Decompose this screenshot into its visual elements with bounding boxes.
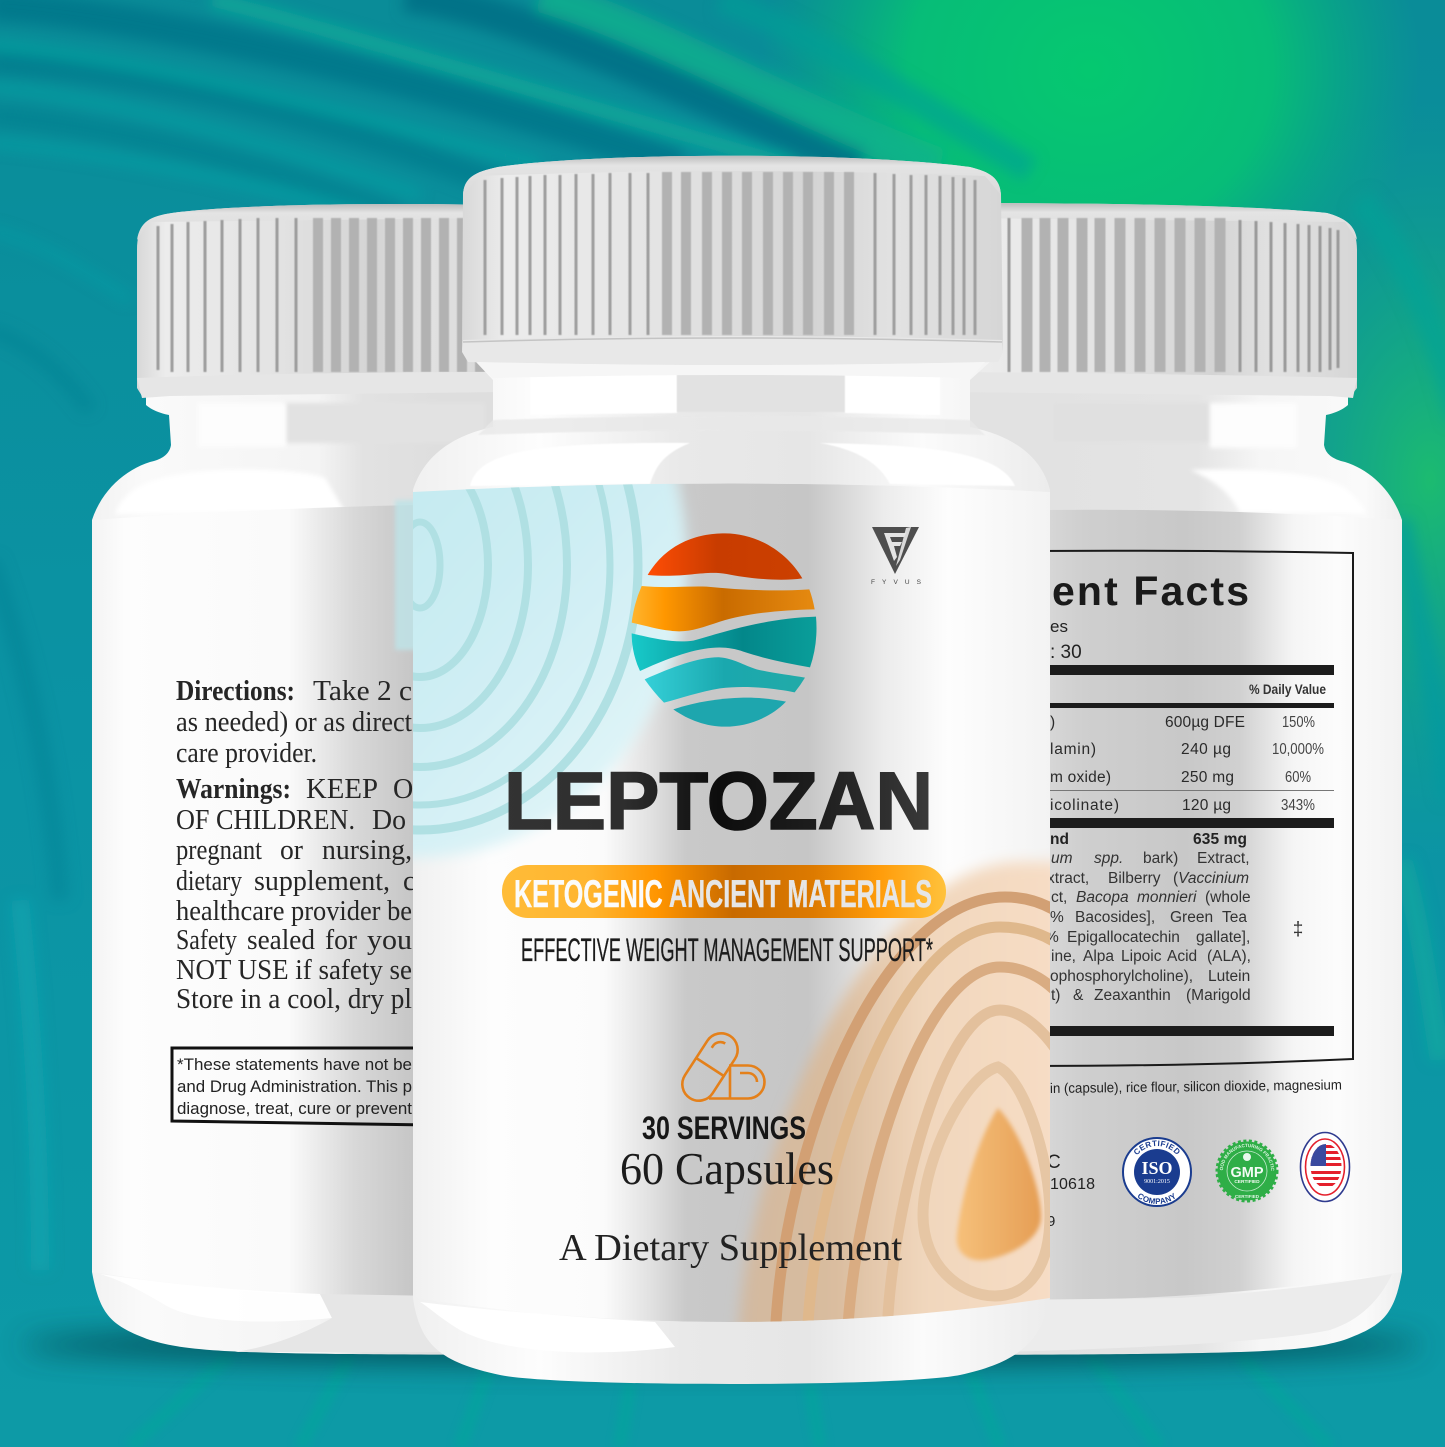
- serving info: es: [1050, 617, 1068, 636]
- warnings text: you: [367, 925, 412, 956]
- directions text: [176, 676, 412, 769]
- tagline pill: [502, 865, 946, 918]
- warnings text: Warnings:: [176, 774, 291, 805]
- maker logo: FYVUS: [871, 527, 922, 586]
- blend ingredient paragraph: Tea: [1222, 909, 1247, 926]
- directions text: as needed) or as direct: [176, 707, 412, 738]
- warnings text: sealed: [247, 925, 315, 956]
- blend ingredient paragraph: (: [1173, 870, 1179, 887]
- warnings text: Do: [372, 805, 406, 836]
- nutrient table rows: ): [1050, 714, 1055, 731]
- nutrient table rows: [1050, 714, 1324, 814]
- blend ingredient paragraph: Extract,: [1197, 850, 1250, 867]
- directions text: care provider.: [176, 738, 317, 769]
- centre bottle body: [413, 362, 1050, 1384]
- left bottle label: [92, 505, 420, 1300]
- left bottle cap: [137, 204, 500, 398]
- centre bottle: front label: [413, 156, 1050, 1384]
- badge: ISO certified: CERTIFIED: [1134, 1140, 1180, 1154]
- other ingredients line: in (capsule), rice flour, silicon dioxide, magnesium: [1050, 1076, 1342, 1096]
- double dagger symbol: ‡: [1293, 919, 1303, 940]
- proprietary blend row: [1050, 831, 1247, 848]
- warnings text: [176, 774, 415, 1015]
- blend ingredient paragraph: (ALA),: [1207, 948, 1251, 965]
- warnings text: O: [393, 774, 413, 805]
- blend ingredient paragraph: ine,: [1051, 948, 1076, 965]
- nutrient table rows: 10,000%: [1272, 741, 1324, 758]
- blend ingredient paragraph: &: [1073, 987, 1084, 1004]
- right bottle base: [1000, 1274, 1392, 1352]
- blend ingredient paragraph: %: [1050, 909, 1064, 926]
- badge: GMP certified: CERTIFIED: [1234, 1179, 1260, 1185]
- blend ingredient paragraph: ct,: [1051, 889, 1067, 906]
- reflection of blue swoosh: [395, 500, 417, 650]
- nutrient table rows: icolinate): [1050, 797, 1119, 814]
- nutrient table rows: 60%: [1285, 769, 1311, 786]
- badge: ISO certified: COMPANY: [1138, 1192, 1175, 1204]
- peach ripple swoosh: [734, 855, 1050, 1322]
- warnings text: c: [403, 866, 415, 897]
- manufacturer address fragments: [1047, 1152, 1095, 1230]
- centre bottle cap: [462, 156, 1003, 378]
- nutrient table rows: lamin): [1050, 741, 1096, 758]
- blend ingredient paragraph: [1045, 850, 1251, 1004]
- badge: USA flag: [1300, 1132, 1350, 1202]
- blend ingredient paragraph: Lipoic: [1121, 948, 1162, 965]
- serving info: [1050, 617, 1082, 663]
- left bottle shoulder shading: [115, 403, 485, 514]
- directions text: Directions:: [176, 676, 295, 707]
- blend ingredient paragraph: ophosphorylcholine),: [1050, 968, 1193, 985]
- proprietary blend row: 635 mg: [1193, 831, 1247, 848]
- blend ingredient paragraph: xtract,: [1047, 870, 1089, 887]
- blend ingredient paragraph: gallate],: [1196, 929, 1250, 946]
- proprietary blend row: nd: [1050, 831, 1069, 848]
- serving info: : 30: [1050, 642, 1082, 663]
- FDA disclaimer box: diagnose, treat, cure or prevent: [177, 1099, 412, 1118]
- brand logo: sun and waves: [632, 533, 817, 727]
- blend ingredient paragraph: Zeaxanthin: [1094, 987, 1171, 1004]
- warnings text: dietary: [176, 866, 242, 897]
- blend ingredient paragraph: %: [1045, 929, 1059, 946]
- badge: GMP certified: [1216, 1140, 1278, 1202]
- warnings text: nursing,: [322, 835, 412, 866]
- nutrient table rows: 240 µg: [1181, 741, 1231, 758]
- product name: LEPTOZAN: [504, 756, 933, 847]
- shoulder highlights: [470, 443, 1015, 486]
- supplement facts panel: [1030, 551, 1353, 1066]
- nutrient table rows: m oxide): [1050, 769, 1111, 786]
- left bottle body: [92, 388, 500, 1355]
- blend ingredient paragraph: (Marigold: [1186, 987, 1251, 1004]
- nutrient table rows: 343%: [1281, 797, 1315, 814]
- directions text: Take 2 c: [313, 676, 412, 707]
- warnings text: or: [280, 835, 304, 866]
- warnings text: for: [325, 925, 358, 956]
- badge: ISO certified: ISO: [1141, 1158, 1173, 1178]
- FDA disclaimer box: and Drug Administration. This p: [177, 1077, 412, 1096]
- warnings text: NOT USE if safety se: [176, 955, 412, 986]
- blend ingredient paragraph: (whole: [1205, 889, 1251, 906]
- blend ingredient paragraph: t): [1051, 987, 1060, 1004]
- blue ripple swoosh: [413, 484, 693, 860]
- servings count: 30 SERVINGS: [642, 1110, 806, 1146]
- badge: ISO certified: 9001:2015: [1144, 1179, 1170, 1185]
- maker logo: FYVUS: FYVUS: [871, 579, 922, 586]
- blend ingredient paragraph: Bilberry: [1108, 870, 1161, 887]
- warnings text: Safety: [176, 925, 237, 956]
- neck highlights: [478, 373, 985, 435]
- FDA disclaimer box: *These statements have not be: [177, 1055, 412, 1074]
- warnings text: Store in a cool, dry pl: [176, 984, 412, 1015]
- blend ingredient paragraph: spp.: [1094, 850, 1123, 867]
- nutrient table rows: 120 µg: [1182, 797, 1231, 814]
- subheading: EFFECTIVE WEIGHT MANAGEMENT SUPPORT*: [521, 932, 933, 968]
- panel border: [1030, 551, 1353, 1066]
- right bottle: supplement facts side: [92, 203, 1402, 1355]
- blend ingredient paragraph: Green: [1170, 909, 1213, 926]
- right bottle label: [1040, 510, 1402, 1300]
- peach teardrop: [957, 1108, 1041, 1260]
- tagline pill: KETOGENIC ANCIENT MATERIALS: [514, 873, 932, 916]
- right bottle shoulder shading: [1053, 403, 1366, 513]
- blend ingredient paragraph: Lutein: [1208, 968, 1250, 985]
- blend ingredient paragraph: Bacosides],: [1075, 909, 1155, 926]
- warnings text: healthcare provider be: [176, 896, 412, 927]
- left bottle base highlight: [100, 1274, 332, 1322]
- panel heading: ent Facts: [1052, 568, 1249, 614]
- warnings text: pregnant: [176, 835, 262, 866]
- blend ingredient paragraph: monnieri: [1137, 889, 1197, 906]
- capsule count: 60 Capsules: [620, 1143, 834, 1194]
- blend ingredient paragraph: Acid: [1167, 948, 1197, 965]
- left bottle: directions and warnings side: [92, 204, 500, 1355]
- blend ingredient paragraph: um: [1051, 850, 1073, 867]
- manufacturer address fragments: 10618: [1050, 1176, 1095, 1193]
- blend ingredient paragraph: Bacopa: [1076, 889, 1129, 906]
- manufacturer address fragments: C: [1047, 1152, 1061, 1173]
- FDA disclaimer box: [172, 1048, 430, 1125]
- blend ingredient paragraph: Vaccinium: [1178, 870, 1249, 887]
- blend ingredient paragraph: Alpa: [1083, 948, 1114, 965]
- front label: [413, 484, 1050, 1322]
- warnings text: KEEP: [306, 774, 378, 805]
- right bottle body: [950, 388, 1402, 1355]
- icon: capsules: [676, 1027, 765, 1107]
- nutrient table rows: 600µg DFE: [1165, 714, 1245, 731]
- nutrient table rows: 250 mg: [1181, 769, 1234, 786]
- badge: GMP certified: CERTIFIED: [1235, 1194, 1260, 1199]
- blend ingredient paragraph: bark): [1143, 850, 1178, 867]
- right bottle cap: [950, 203, 1357, 398]
- badge: GMP certified: GMP: [1230, 1165, 1264, 1181]
- badge: ISO certified: [1122, 1137, 1192, 1207]
- manufacturer address fragments: 9: [1047, 1213, 1055, 1230]
- nutrient table rows: 150%: [1282, 714, 1315, 731]
- badge: GMP certified: GOOD MANUFACTURING PRACTICE: [1220, 1144, 1274, 1171]
- base highlight: [420, 1302, 675, 1352]
- blend ingredient paragraph: Epigallocatechin: [1067, 929, 1180, 946]
- thick divider bars: [1030, 665, 1334, 1036]
- warnings text: supplement,: [254, 866, 390, 897]
- warnings text: OF CHILDREN.: [176, 805, 355, 836]
- daily value heading: % Daily Value: [1249, 682, 1326, 697]
- product type: A Dietary Supplement: [559, 1227, 902, 1269]
